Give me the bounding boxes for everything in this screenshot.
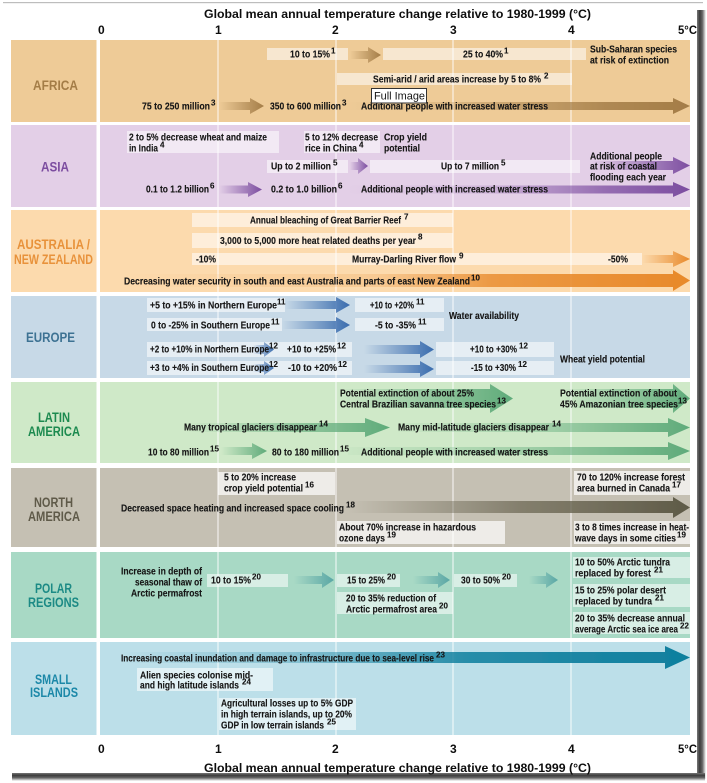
band: +10 to +20%: +10 to +20% xyxy=(370,300,414,311)
band: -15 to +30%: 12 xyxy=(518,360,527,369)
band: Arctic sea ice decrease xyxy=(573,612,690,635)
band: +10 to +20%: 11 xyxy=(416,298,425,306)
arrow xyxy=(364,341,434,358)
agricultural losses band: GDP in low terrain islands xyxy=(221,720,324,731)
heading: Africa: AFRICA xyxy=(33,78,78,93)
arrow xyxy=(413,572,450,588)
semi-arid band: 2 xyxy=(544,72,549,80)
species extinction band 25 to 40%: 1 xyxy=(504,46,509,56)
label: mid-latitude glaciers: 14 xyxy=(552,420,561,428)
band: permafrost area reduction xyxy=(337,592,453,615)
heat deaths band: 8 xyxy=(418,232,423,242)
species extinction band 10 to 15%: 1 xyxy=(331,46,336,56)
band: 15 to 25% xyxy=(337,572,400,587)
band: 10 to 15% xyxy=(207,572,288,587)
semi-arid band: Semi-arid / arid areas increase by 5 to 8% xyxy=(373,74,541,86)
water stress 350 to 600 million: 350 to 600 million xyxy=(270,101,341,112)
bottom axis scale: 2 xyxy=(332,742,339,756)
top axis title: Global mean annual temperature change relative to 1980-1999 (°C) xyxy=(204,9,591,21)
ozone days band: 19 xyxy=(387,530,396,540)
arrow xyxy=(219,98,264,114)
band: tundra replaced by forest: 21 xyxy=(654,566,663,574)
top axis scale: 4 xyxy=(568,23,575,37)
water stress 75 to 250 million: 3 xyxy=(211,98,216,108)
band: southern Europe wheat: 12 xyxy=(269,360,278,369)
band: northern Europe water: 11 xyxy=(277,298,286,306)
label: water security: Decreasing water security in south and east Australia and parts of east New Zealand xyxy=(124,276,470,287)
label: savanna extinction: 13 xyxy=(497,396,506,406)
band: northern Europe wheat xyxy=(147,342,352,357)
band: polar desert replaced by tundra: 15 to 25% polar desert xyxy=(575,585,667,596)
coastal flooding band up to 2 million: 5 xyxy=(333,158,338,168)
bottom axis scale: 0 xyxy=(98,742,105,756)
crop yield band: 16 xyxy=(305,480,314,490)
alien species band: and high latitude islands xyxy=(140,680,239,691)
coastal flooding band up to 7 million xyxy=(370,158,580,173)
ozone days band: About 70% increase in hazardous xyxy=(339,522,476,533)
band: polar desert replaced by tundra: 21 xyxy=(655,594,664,602)
bottom axis scale: 1 xyxy=(215,742,222,756)
band: northern Europe wheat: +2 to +10% in Northern Europe xyxy=(150,344,269,355)
heading: Small Islands xyxy=(30,672,78,700)
long arrow: water stress xyxy=(348,442,690,460)
water stress 350 to 600 million: 3 xyxy=(342,98,347,108)
band: 15 to 25%: 20 xyxy=(387,572,396,582)
top axis scale xyxy=(98,23,697,37)
label: sub-Saharan species: Sub-Saharan species xyxy=(590,44,677,56)
heat-wave band: wave days in some cities xyxy=(574,533,676,544)
label: coastal flooding: Additional people xyxy=(590,151,662,162)
heading: Latin America: LATIN xyxy=(38,410,70,425)
species extinction band 25 to 40% xyxy=(383,46,586,60)
label: mid-latitude glaciers: Many mid-latitude glaciers disappear xyxy=(398,422,549,433)
coastal flooding band up to 7 million: 5 xyxy=(501,158,506,168)
water stress 0.2 to 1.0 billion: 0.2 to 1.0 billion xyxy=(271,184,337,195)
label: water availability: Water availability xyxy=(449,311,519,322)
label: savanna extinction xyxy=(340,388,506,410)
panel: Small Islands xyxy=(11,642,690,735)
water stress 0.1 to 1.2 billion: 0.1 to 1.2 billion xyxy=(146,184,209,195)
label: space heating and cooling: 18 xyxy=(346,500,355,510)
top axis scale: 0 xyxy=(98,23,105,37)
band: +10 to +30%: 12 xyxy=(519,342,528,350)
heading: North America xyxy=(28,495,80,524)
page top rule xyxy=(3,2,703,3)
heading: Polar Regions: POLAR xyxy=(35,581,72,596)
coastal flooding band up to 7 million: Up to 7 million xyxy=(441,162,499,172)
water stress 10 to 80 million: 15 xyxy=(210,444,219,454)
water stress 10 to 80 million: 10 to 80 million xyxy=(148,447,209,458)
long arrow: coastal inundation xyxy=(120,646,690,669)
band: -15 to +30%: -15 to +30% xyxy=(471,363,516,374)
band: northern Europe wheat: 12 xyxy=(269,342,278,350)
heading: Polar Regions xyxy=(28,581,79,610)
panel: Asia xyxy=(11,125,690,207)
heading: Australia / New Zealand xyxy=(14,237,93,267)
heat deaths band xyxy=(192,232,453,248)
arrow: Amazonian extinction xyxy=(560,384,690,413)
bottom axis title: Global mean annual temperature change relative to 1980-1999 (°C) xyxy=(204,763,591,775)
heat-wave band: 19 xyxy=(677,530,686,540)
band: southern Europe wheat xyxy=(147,360,352,375)
river flow band: -10% xyxy=(196,254,216,266)
rice in China band: 5 to 12% decrease xyxy=(305,132,378,144)
arrow xyxy=(219,182,262,197)
top axis scale: 2 xyxy=(332,23,339,37)
label: Arctic permafrost thaw xyxy=(121,566,203,599)
arrow xyxy=(350,47,381,63)
label: sub-Saharan species: at risk of extinction xyxy=(590,56,669,66)
band: 15 to 25%: 15 to 25% xyxy=(347,575,385,586)
wheat and maize band xyxy=(127,131,279,154)
band: -5 to -35%: 11 xyxy=(418,318,427,326)
label: Amazonian extinction: Potential extinction of about xyxy=(560,388,678,399)
band: 10 to 15%: 10 to 15% xyxy=(211,575,251,586)
water stress 0.1 to 1.2 billion: 6 xyxy=(210,182,215,190)
bottom axis scale xyxy=(98,742,697,756)
label: space heating and cooling: Decreased space heating and increased space cooling xyxy=(121,503,344,514)
label: savanna extinction: Central Brazilian savanna tree species xyxy=(340,399,496,410)
panel: Latin America xyxy=(11,382,690,463)
top axis scale: 5°C xyxy=(678,23,697,37)
label: water security: 10 xyxy=(471,274,480,282)
wheat and maize band: 4 xyxy=(160,140,165,150)
band: permafrost area reduction: 20 xyxy=(439,602,448,610)
panel: Australia / New Zealand xyxy=(11,210,690,292)
river flow band xyxy=(192,252,642,266)
panel: North America xyxy=(11,468,690,547)
arrow xyxy=(529,572,558,588)
band: -5 to -35%: -5 to -35% xyxy=(375,320,416,331)
page right shadow xyxy=(697,10,706,779)
label: Amazonian extinction: 13 xyxy=(678,396,687,406)
band: southern Europe wheat: 12 xyxy=(338,360,347,369)
arrow xyxy=(221,443,267,459)
label: sub-Saharan species xyxy=(590,44,677,66)
forest burned band: area burned in Canada xyxy=(577,483,670,494)
label: wheat yield potential: Wheat yield potential xyxy=(560,354,645,365)
band: 30 to 50%: 30 to 50% xyxy=(461,575,500,586)
label: crop yield potential: potential xyxy=(384,144,420,154)
label: Arctic permafrost thaw: seasonal thaw of xyxy=(135,577,203,588)
band: tundra replaced by forest: 10 to 50% Arctic tundra xyxy=(575,557,670,568)
panel: Europe xyxy=(11,296,690,378)
semi-arid band xyxy=(337,72,572,86)
alien species band: Alien species colonise mid- xyxy=(140,670,253,681)
arrow xyxy=(350,158,368,174)
crop yield band: 5 to 20% increase xyxy=(224,472,296,483)
arrow: savanna extinction xyxy=(337,384,513,413)
band: Arctic sea ice decrease: 20 to 35% decrease annual xyxy=(575,613,685,624)
species extinction band 10 to 15%: 10 to 15% xyxy=(290,50,330,60)
arrow xyxy=(294,572,334,588)
river flow band: Murray-Darling River flow xyxy=(352,254,456,266)
forest burned band: 17 xyxy=(672,480,681,490)
band: northern Europe water: +5 to +15% in Northern Europe xyxy=(150,300,277,311)
reef bleaching band xyxy=(192,212,453,227)
top axis scale: 3 xyxy=(450,23,457,37)
page bottom shadow xyxy=(12,773,705,781)
arrow: river flow xyxy=(642,251,690,267)
heading: Latin America xyxy=(28,410,80,439)
band: -15 to +30% xyxy=(436,360,554,375)
label: coastal flooding: flooding each year xyxy=(590,172,666,183)
label: water stress: Additional people with increased water stress xyxy=(361,447,548,458)
heat deaths band: 3,000 to 5,000 more heat related deaths per year xyxy=(220,236,416,247)
heading: Australia / New Zealand: NEW ZEALAND xyxy=(14,252,93,267)
band: tundra replaced by forest xyxy=(573,557,690,579)
river flow band: 9 xyxy=(459,252,464,260)
band: Arctic sea ice decrease: 22 xyxy=(680,622,689,630)
label: tropical glaciers: Many tropical glaciers disappear xyxy=(184,422,317,433)
tooltip: full image: Full Image xyxy=(374,90,425,102)
panel: Africa xyxy=(11,40,690,122)
water stress 80 to 180 million: 15 xyxy=(340,444,349,454)
band: +10 to +30% xyxy=(436,342,554,357)
label: crop yield potential xyxy=(384,132,427,154)
ozone days band: ozone days xyxy=(339,533,385,544)
heading: North America: AMERICA xyxy=(28,509,80,524)
alien species band xyxy=(137,668,273,691)
arrow: tropical glaciers xyxy=(185,418,390,437)
agricultural losses band xyxy=(219,698,356,731)
long arrow: water security xyxy=(122,270,690,291)
rice in China band: rice in China xyxy=(305,144,357,154)
heading: Small Islands: ISLANDS xyxy=(30,685,78,700)
heading: Latin America: AMERICA xyxy=(28,424,80,439)
arrow xyxy=(364,361,434,377)
band: -5 to -35% xyxy=(355,318,444,331)
band: 30 to 50%: 20 xyxy=(502,572,511,582)
river flow band: -50% xyxy=(608,254,628,266)
heat-wave band xyxy=(574,521,690,544)
alien species band: 24 xyxy=(242,678,251,686)
wheat and maize band: 2 to 5% decrease wheat and maize xyxy=(129,132,267,144)
band: polar desert replaced by tundra xyxy=(573,584,690,607)
species extinction band 25 to 40%: 25 to 40% xyxy=(463,50,503,60)
label: coastal inundation: Increasing coastal inundation and damage to infrastructure due to sea-level rise xyxy=(121,653,434,664)
heading: Australia / New Zealand: AUSTRALIA / xyxy=(17,237,90,252)
bottom axis scale: 4 xyxy=(568,742,575,756)
label: Arctic permafrost thaw: Arctic permafrost xyxy=(131,588,203,599)
label: Amazonian extinction: 45% Amazonian tree species xyxy=(560,399,678,410)
arrow xyxy=(285,297,350,313)
panel: Polar Regions xyxy=(11,552,690,638)
label: tropical glaciers: 14 xyxy=(319,420,328,428)
label: coastal flooding: at risk of coastal xyxy=(590,161,657,172)
band: 10 to 15%: 20 xyxy=(252,572,261,582)
water stress 75 to 250 million: 75 to 250 million xyxy=(142,101,210,112)
bottom axis scale: 3 xyxy=(450,742,457,756)
agricultural losses band: Agricultural losses up to 5% GDP xyxy=(221,698,353,709)
forest burned band: 70 to 120% increase forest xyxy=(577,472,686,483)
long arrow: space heating and cooling xyxy=(120,497,690,518)
agricultural losses band: 25 xyxy=(327,718,336,726)
band: Arctic sea ice decrease: average Arctic sea ice area xyxy=(575,624,678,635)
crop yield band xyxy=(218,472,335,495)
band: polar desert replaced by tundra: replaced by tundra xyxy=(575,596,652,607)
label: Arctic permafrost thaw: Increase in depth of xyxy=(121,566,203,577)
band: +10 to +30%: +10 to +30% xyxy=(470,344,517,355)
label: savanna extinction: Potential extinction of about 25% xyxy=(340,388,474,399)
heading: Asia: ASIA xyxy=(41,160,69,174)
heading: Small Islands: SMALL xyxy=(35,672,72,687)
label: coastal inundation: 23 xyxy=(436,650,445,660)
label: crop yield potential: Crop yield xyxy=(384,132,427,144)
coastal flooding band up to 2 million: Up to 2 million xyxy=(271,162,331,172)
label: water stress: Additional people with increased water stress xyxy=(361,101,548,112)
heading: Polar Regions: REGIONS xyxy=(28,595,79,610)
band: northern Europe wheat: +10 to +25% xyxy=(287,344,336,355)
agricultural losses band: in high terrain islands, up to 20% xyxy=(221,709,352,720)
long arrow: water stress xyxy=(348,182,690,197)
forest burned band xyxy=(574,471,690,495)
band: southern Europe water: 0 to -25% in Southern Europe xyxy=(151,320,270,331)
heading: Europe: EUROPE xyxy=(26,330,75,345)
arrow: mid-latitude glaciers xyxy=(398,418,690,437)
ozone days band xyxy=(337,521,505,544)
long arrow: water stress xyxy=(348,98,690,114)
band: southern Europe water: 11 xyxy=(271,318,280,326)
band: tundra replaced by forest: replaced by forest xyxy=(575,568,652,579)
wheat and maize band: in India xyxy=(129,144,158,154)
bottom axis scale: 5°C xyxy=(678,742,697,756)
heading: North America: NORTH xyxy=(34,495,73,510)
water stress 80 to 180 million: 80 to 180 million xyxy=(272,447,339,458)
band: permafrost area reduction: Arctic permafrost area xyxy=(346,604,437,615)
reef bleaching band: Annual bleaching of Great Barrier Reef xyxy=(250,215,402,226)
label: coastal flooding xyxy=(590,151,666,183)
crop yield band: crop yield potential xyxy=(224,483,303,494)
top axis scale: 1 xyxy=(215,23,222,37)
reef bleaching band: 7 xyxy=(404,212,409,222)
rice in China band: 4 xyxy=(359,140,364,150)
band: permafrost area reduction: 20 to 35% reduction of xyxy=(346,593,437,604)
arrow xyxy=(282,317,350,333)
label: Amazonian extinction xyxy=(560,388,687,410)
species extinction band 10 to 15% xyxy=(267,46,348,60)
label: water stress: Additional people with increased water stress xyxy=(361,184,548,195)
coastal flooding band up to 2 million xyxy=(267,158,348,173)
water stress 0.2 to 1.0 billion: 6 xyxy=(338,182,343,190)
band: southern Europe wheat: -10 to +20% xyxy=(288,363,337,374)
rice in China band xyxy=(304,131,380,154)
band: 30 to 50% xyxy=(454,572,517,587)
band: northern Europe wheat: 12 xyxy=(337,342,346,350)
arrow: coastal flooding xyxy=(590,157,690,174)
band: +10 to +20% xyxy=(355,298,444,312)
band: southern Europe wheat: +3 to +4% in Southern Europe xyxy=(150,363,269,374)
